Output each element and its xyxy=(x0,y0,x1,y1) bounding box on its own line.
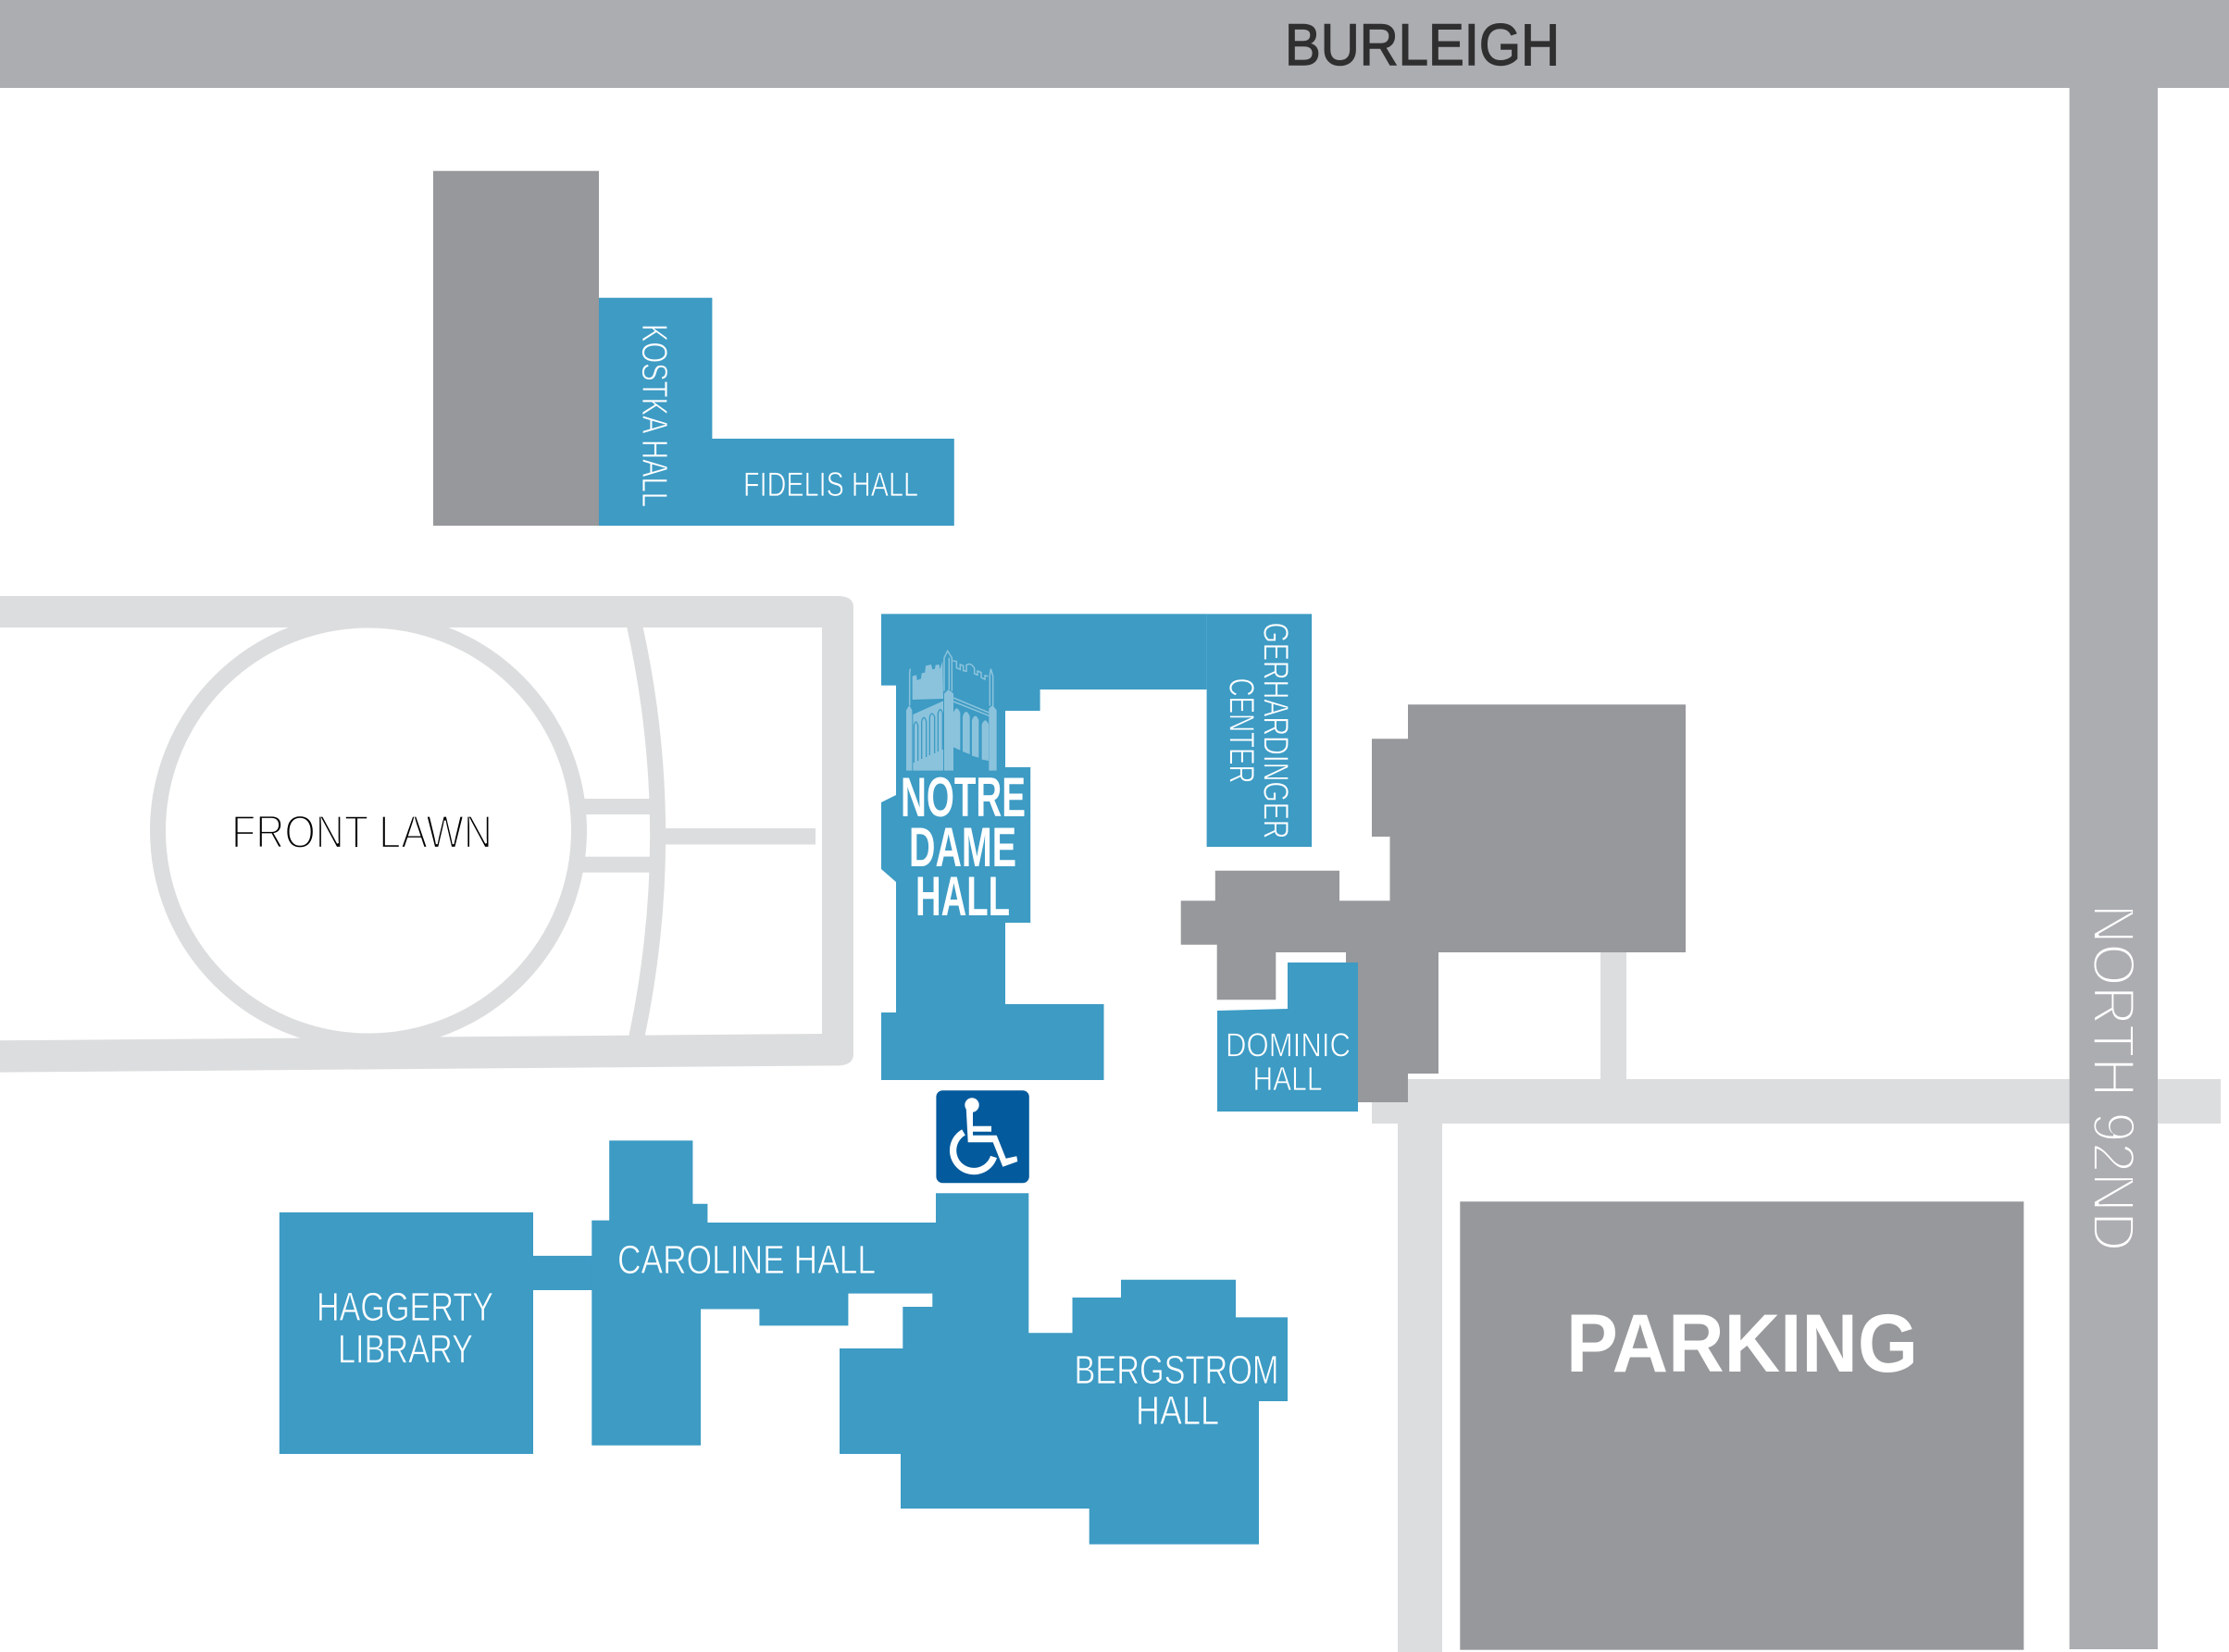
front lawn walkways xyxy=(0,596,853,1073)
bergstrom hall label xyxy=(1074,1348,1279,1434)
road: burleigh xyxy=(0,0,2229,88)
hall: HALL xyxy=(1253,1060,1322,1098)
dominic hall xyxy=(1217,963,1358,1112)
kostka hall label: KOSTKA HALL xyxy=(634,324,674,507)
curved walkway xyxy=(635,627,658,1034)
gerhardinger label line two: CENTER xyxy=(1222,677,1261,783)
tower left arch outlines xyxy=(914,710,942,763)
icon: wheelchair accessibility xyxy=(936,1090,1029,1183)
road: north 92nd xyxy=(2070,83,2158,1649)
front lawn label: FRONT LAWN xyxy=(231,806,492,858)
gray building: east xyxy=(1181,704,1686,1102)
dominic: DOMINIC xyxy=(1226,1026,1351,1064)
bergstrom: BERGSTROM xyxy=(1074,1348,1279,1393)
tower right arches xyxy=(953,708,989,761)
caroline and bergstrom halls xyxy=(591,1140,1288,1545)
icon body xyxy=(966,1108,1017,1167)
notre dame hall xyxy=(881,614,1207,1080)
fidelis hall label: FIDELIS HALL xyxy=(743,466,918,503)
parking label: PARKING xyxy=(1566,1297,1918,1389)
haggerty library label xyxy=(317,1285,493,1372)
tower piers xyxy=(906,689,997,771)
gray building: north xyxy=(433,171,599,526)
gerhardinger label line one: GERHARDINGER xyxy=(1255,622,1294,838)
burleigh label: BURLEIGH xyxy=(1285,13,1560,78)
notre: NOTRE xyxy=(901,766,1026,828)
parking lot xyxy=(1460,1201,2024,1650)
tower left lower wall xyxy=(913,701,943,771)
dominic hall label xyxy=(1226,1026,1351,1098)
kostka and fidelis halls xyxy=(599,298,954,526)
icon background xyxy=(936,1090,1029,1183)
gerhardinger center xyxy=(1207,614,1312,847)
east walkways xyxy=(1372,952,2221,1652)
icon head xyxy=(965,1098,979,1112)
walkway connector lower xyxy=(579,857,657,873)
caroline hall label: CAROLINE HALL xyxy=(617,1237,876,1283)
library: LIBRARY xyxy=(338,1326,473,1372)
front lawn circle xyxy=(157,620,579,1041)
hall: HALL xyxy=(915,865,1010,927)
hall: HALL xyxy=(1136,1388,1219,1434)
library connector xyxy=(532,1256,592,1290)
north 92nd label: NORTH 92ND xyxy=(2081,904,2148,1251)
walkway connector to edge xyxy=(657,828,816,844)
tower left upper wall xyxy=(913,661,943,700)
walkway connector upper xyxy=(579,799,657,814)
dame: DAME xyxy=(909,816,1016,878)
haggerty library xyxy=(280,1212,533,1454)
icon wheel xyxy=(953,1133,994,1172)
tower outlines xyxy=(910,651,993,715)
perimeter walkway xyxy=(0,596,853,1073)
icon: notre dame tower xyxy=(906,651,997,771)
notre dame hall label xyxy=(901,766,1026,927)
haggerty: HAGGERTY xyxy=(317,1285,493,1330)
